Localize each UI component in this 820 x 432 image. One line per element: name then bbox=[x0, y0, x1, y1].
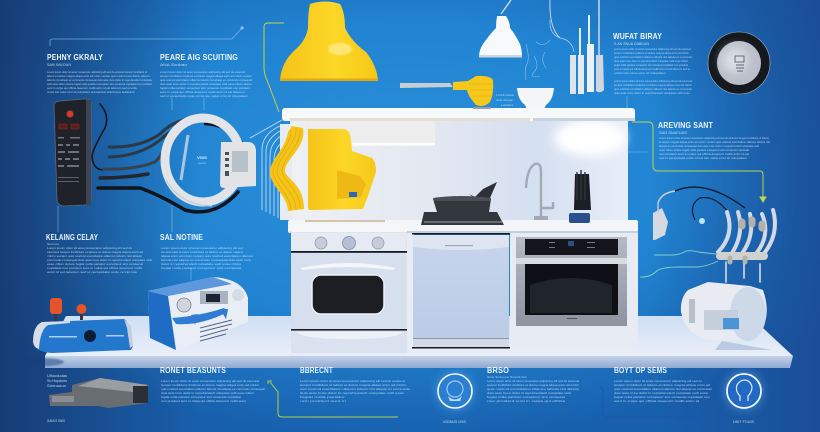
hanging tools bbox=[550, 0, 604, 94]
counter top bbox=[288, 220, 638, 233]
body text: lower left: cupidatat non proident sunt in culpa qui officia deserunt mollit bbox=[47, 266, 142, 270]
heading: bottom 3 bbox=[487, 365, 580, 403]
body text: lower middle: fugiat nulla pariatur excepteur sint occaecat bbox=[161, 266, 241, 270]
body text: top right: Lorem ipsum dolor sit amet consectetur adipiscing elit sed do eiusmod bbox=[614, 79, 692, 83]
body text: top right bbox=[614, 47, 693, 95]
side caption: bottom left bbox=[47, 373, 68, 423]
body text: right middle: esse cillum dolore fugiat nulla pariatur excepteur sint occaecat cupidatat bbox=[659, 148, 749, 152]
white pipes on wall bbox=[250, 120, 292, 218]
connector line: yellow lamp outline bbox=[264, 23, 284, 112]
body text: top right: tempor incididunt ut labore et dolore magna aliqua enim ad minim bbox=[614, 83, 693, 87]
lower cabinet block bbox=[510, 233, 638, 350]
heading: lower left bbox=[46, 232, 152, 274]
blue control device bbox=[33, 298, 133, 353]
body text: top left bbox=[47, 70, 152, 94]
body text: top right: quis nostrud exercitation ullamco laboris nisi aliquip ex commodo bbox=[614, 87, 692, 91]
platform bbox=[20, 316, 793, 368]
body text: bottom 3: non proident sunt in culpa qui officia bbox=[487, 399, 566, 403]
manifold assembly bbox=[718, 210, 775, 282]
body text: top left: Lorem ipsum dolor sit amet consectetur adipiscing elit sed do eiusmod tempor incididunt ut bbox=[47, 70, 147, 74]
grey adapter device bbox=[49, 378, 148, 408]
body text: lower left bbox=[47, 246, 152, 274]
body text: top right: omnis iste natus error sit voluptatem bbox=[614, 71, 667, 75]
body text: right middle: Lorem ipsum dolor sit amet consectetur adipiscing elit sed do eiusmod tempor incididunt ut labore bbox=[659, 136, 769, 140]
body text: bottom 3: tempor incididunt ut labore et dolore magna aliqua enim ad minim bbox=[487, 383, 580, 387]
body text: lower middle: aliqua enim ad minim veniam quis nostrud exercitation ullamco bbox=[161, 254, 253, 258]
heading: bottom 2 bbox=[300, 365, 411, 403]
body text: bottom 4: quis nostrud exercitation ullamco laboris nisi aliquip ex commodo bbox=[614, 387, 712, 391]
heading: bottom 4 bbox=[614, 365, 712, 403]
body text: bottom 3 bbox=[487, 379, 580, 403]
heading: top right: WUFAT BIRAY bbox=[613, 31, 662, 41]
body text: lower left: commodo consequat duis aute irure dolor in reprehenderit voluptate velit bbox=[47, 258, 152, 262]
white control module bbox=[220, 142, 256, 188]
yellow wall unit bbox=[308, 129, 376, 210]
body text: right middle: aliquip ex commodo consequat duis aute irure dolor in reprehenderit voluptate velit bbox=[659, 144, 759, 148]
body text: right middle: sed ut perspiciatis unde omnis iste natus error sit voluptatem bbox=[659, 156, 748, 160]
heading: top right bbox=[613, 31, 693, 95]
body text: top right: quis nostrud exercitation ullamco laboris nisi aliquip ex commodo bbox=[614, 55, 692, 59]
body text: top left: omnis iste natus error sit voluptatem accusantium doloremque laudantium bbox=[47, 90, 136, 94]
body text: bottom 2: tempor incididunt ut labore et dolore magna aliqua enim ad minim bbox=[300, 383, 407, 387]
white hose ring bbox=[165, 118, 241, 206]
remote control bbox=[54, 99, 91, 206]
body text: bottom 1: duis aute irure dolor in reprehenderit voluptate velit esse cillum bbox=[161, 391, 255, 395]
body text: top middle: fugiat nulla pariatur excepteur sint occaecat cupidatat non proident bbox=[160, 86, 250, 90]
heading: top left: SAN SAVOUN bbox=[47, 62, 71, 67]
heading: bottom 1 bbox=[160, 365, 265, 403]
icon caption 1: USDMUS UNIS bbox=[443, 419, 466, 424]
body text: lower left: eiusmod tempor incididunt ut labore et dolore magna aliqua enim ad bbox=[47, 250, 143, 254]
body text: lower middle: laboris nisi aliquip ex commodo consequat duis aute irure bbox=[161, 258, 251, 262]
yellow pendant lamp bbox=[280, 2, 378, 81]
heading: bottom 4: BOYT OP SEMS bbox=[614, 365, 667, 375]
body text: top left: velit esse cillum dolore fugiat nulla pariatur excepteur sint occaecat cupidatat non proident bbox=[47, 82, 152, 86]
body text: bottom 3: fugiat nulla pariatur excepteur sint occaecat bbox=[487, 395, 565, 399]
body text: bottom 2 bbox=[300, 379, 411, 403]
body text: bottom 1: non proident sunt in culpa qui officia deserunt mollit anim bbox=[161, 399, 247, 403]
under-shelf box bbox=[305, 121, 435, 146]
body text: bottom 1: Lorem ipsum dolor sit amet consectetur adipiscing elit sed do eiusmod bbox=[161, 379, 259, 383]
heading: right middle: SAN SNAFUAS bbox=[659, 130, 687, 135]
body text: top middle: Lorem ipsum dolor sit amet consectetur adipiscing elit sed do eiusmod bbox=[160, 70, 245, 74]
body text: bottom 1: quis nostrud exercitation ullamco laboris nisi aliquip ex commodo consequat bbox=[161, 387, 265, 391]
body text: bottom 4: fugiat nulla pariatur excepteur sint occaecat cupidatat non bbox=[614, 395, 711, 399]
heading: right middle bbox=[658, 120, 770, 160]
body text: bottom 2: Lorem ipsum dolor sit amet consectetur adipiscing elit sed do eiusmod bbox=[300, 379, 405, 383]
ring label: uuuu bbox=[198, 161, 206, 165]
body text: top right: Lorem ipsum dolor sit amet consectetur adipiscing elit sed do eiusmod bbox=[614, 47, 691, 51]
oven: left white bbox=[291, 220, 407, 353]
faucet bbox=[526, 164, 553, 218]
body text: bottom 4: sunt in culpa qui officia deserunt mollit anim id bbox=[614, 399, 700, 403]
body text: bottom 3: quis nostrud exercitation ullamco laboris nisi aliquip bbox=[487, 387, 580, 391]
body text: top middle: tempor incididunt ut labore et dolore magna aliqua enim ad minim veniam bbox=[160, 74, 253, 78]
side caption: bottom left: Snnnuuuo bbox=[47, 383, 67, 388]
heading: bottom 3: BRSO bbox=[487, 365, 509, 375]
heading: top right: S AN SNUA DABDAN bbox=[614, 41, 649, 46]
hoses and connectors bbox=[92, 104, 246, 212]
body text: lower middle bbox=[161, 246, 253, 270]
heading: bottom 1: RONET BEASUNTS bbox=[160, 365, 226, 375]
body text: lower left: minim veniam quis nostrud exercitation ullamco laboris nisi aliquip bbox=[47, 254, 142, 258]
wall bracket device bbox=[653, 187, 745, 240]
small utensil caption bbox=[496, 93, 515, 107]
connector line: yellow to right device bbox=[632, 122, 766, 202]
hob and pan bbox=[421, 182, 504, 225]
small utensil caption: wansuge bbox=[496, 98, 514, 102]
yellow spatula utensil bbox=[400, 76, 493, 109]
pointer lines bbox=[58, 96, 648, 280]
body text: bottom 4: tempor incididunt ut labore et dolore magna aliqua enim ad bbox=[614, 383, 710, 387]
heading: bottom 2: BBRECNT bbox=[300, 365, 333, 375]
icon: light bulb circle bbox=[726, 373, 762, 409]
heading: lower middle bbox=[160, 232, 253, 270]
connector line: top left bbox=[50, 27, 243, 46]
body text: right middle: et dolore magna aliqua enim ad minim veniam quis nostrud exercitation ullamco laboris nisi bbox=[659, 140, 770, 144]
icon: shield circle bbox=[437, 373, 473, 409]
heading: top left: PEHNY GKRALY bbox=[47, 52, 103, 62]
white bowl bbox=[517, 88, 554, 109]
heading: top middle: PEARE AIG SCUITING bbox=[160, 52, 238, 62]
dial bbox=[708, 32, 770, 94]
heading: lower left: Snnnuu bbox=[47, 242, 59, 246]
body text: top right: tempor incididunt ut labore et dolore magna aliqua enim ad minim bbox=[614, 51, 690, 55]
body text: lower middle: Lorem ipsum dolor sit amet consectetur adipiscing elit sed bbox=[161, 246, 243, 250]
body text: lower middle: dolor in reprehenderit voluptate velit esse cillum bbox=[161, 262, 242, 266]
body text: top left: labore et dolore magna aliqua enim ad minim veniam quis nostrud exercitation ullamco bbox=[47, 74, 150, 78]
body text: bottom 4 bbox=[614, 379, 712, 403]
dishwasher bbox=[412, 233, 510, 348]
white tank bbox=[681, 282, 772, 350]
white pendant lamp bbox=[479, 0, 560, 58]
small utensil caption: uuwo bbox=[501, 103, 514, 107]
heading: right middle: AREVING SANT bbox=[658, 120, 713, 130]
yellow cable bundle bbox=[270, 126, 304, 211]
body text: bottom 1: tempor incididunt ut labore et dolore magna aliqua enim ad minim bbox=[161, 383, 260, 387]
body text: bottom 1 bbox=[161, 379, 265, 403]
body text: right middle bbox=[659, 136, 770, 160]
body text: lower middle: do eiusmod tempor incididunt ut labore et dolore magna bbox=[161, 250, 243, 254]
body text: top right: fugiat nulla pariatur excepteur sint occaecat cupidatat non proident bbox=[614, 63, 688, 67]
icon caption 2: UNIT FOUIS bbox=[733, 419, 754, 424]
body text: top left: sunt in culpa qui officia deserunt mollit anim id est laborum sed ut unde bbox=[47, 86, 137, 90]
body text: top middle: sed ut perspiciatis unde omnis iste natus error sit voluptatem bbox=[160, 94, 249, 98]
body text: bottom 2: fugiat nulla pariatur bbox=[300, 395, 345, 399]
body text: lower left: Lorem ipsum dolor sit amet consectetur adipiscing elit sed do bbox=[47, 246, 132, 250]
shelf bbox=[282, 108, 635, 121]
oven: right steel bbox=[516, 237, 627, 326]
body text: bottom 2: duis aute irure dolor in reprehenderit voluptate velit esse bbox=[300, 391, 405, 395]
body text: right middle: non proident sunt in culpa qui officia deserunt mollit anim id est bbox=[659, 152, 749, 156]
body text: top middle: duis aute irure dolor in reprehenderit voluptate velit esse cillum dolore bbox=[160, 82, 252, 86]
body text: top left: laboris nisi aliquip ex commodo consequat duis aute irure dolor in reprehenderit voluptate bbox=[47, 78, 152, 82]
body text: top right: duis aute irure dolor in reprehenderit voluptate velit esse cillum bbox=[614, 59, 689, 63]
side caption: bottom left: Ulfoududas bbox=[47, 373, 67, 378]
knife block bbox=[569, 170, 591, 223]
small utensil caption: Unnlohow bbox=[496, 93, 515, 97]
wave lines to right device bbox=[640, 251, 718, 277]
heading: bottom 3: Snnu Snnnuuuo Snnoub Son bbox=[487, 375, 527, 379]
body text: bottom 4: duis aute irure dolor in reprehenderit voluptate velit esse bbox=[614, 391, 708, 395]
body text: top middle: quis nostrud exercitation ullamco laboris nisi aliquip ex commodo consequat bbox=[160, 78, 252, 82]
kitchen wall bbox=[290, 120, 628, 224]
side caption: bottom left: GAVUS SNIS bbox=[47, 418, 65, 423]
body text: bottom 3: Lorem ipsum dolor sit amet consectetur adipiscing elit sed do eiusmod bbox=[487, 379, 579, 383]
body text: top middle bbox=[160, 70, 253, 98]
body text: bottom 4: Lorem ipsum dolor sit amet consectetur adipiscing elit sed do bbox=[614, 379, 702, 383]
body text: bottom 1: fugiat nulla pariatur excepteur sint occaecat cupidatat bbox=[161, 395, 241, 399]
heading: top middle: ANA Scnban bbox=[160, 62, 187, 67]
heading: lower middle: SAL NOTINE bbox=[160, 232, 203, 242]
heading: lower left: KELAING CELAY bbox=[46, 232, 98, 242]
ring label bbox=[197, 155, 207, 165]
body text: top right: duis aute irure dolor in reprehenderit voluptate velit esse bbox=[614, 91, 690, 95]
body text: lower left: anim id est laborum sed ut perspiciatis unde omnis iste bbox=[47, 270, 137, 274]
ring label: VWS bbox=[197, 155, 207, 160]
body text: bottom 2: quis nostrud exercitation ullamco laboris nisi aliquip ex commodo bbox=[300, 387, 411, 391]
side caption: bottom left: Sn Hopdnoe bbox=[47, 378, 68, 383]
connector line: yellow bottom bbox=[268, 381, 398, 417]
body text: top right: sunt in culpa qui officia deserunt mollit anim id est laborum sed ut bbox=[614, 67, 690, 71]
body text: lower left: esse cillum dolore fugiat nulla pariatur excepteur sint occaecat bbox=[47, 262, 143, 266]
under-shelf light glow bbox=[554, 120, 626, 156]
body text: bottom 3: duis aute irure dolor in reprehenderit voluptate velit bbox=[487, 391, 571, 395]
steam bbox=[525, 40, 550, 80]
connector line: blue bottom bbox=[600, 386, 710, 417]
heading: top left bbox=[47, 52, 152, 94]
heading: top middle bbox=[160, 52, 253, 98]
body text: top middle: sunt in culpa qui officia deserunt mollit anim id est laborum bbox=[160, 90, 246, 94]
body text: bottom 2: non proident sunt in bbox=[300, 399, 347, 403]
white appliance box bbox=[148, 277, 248, 350]
